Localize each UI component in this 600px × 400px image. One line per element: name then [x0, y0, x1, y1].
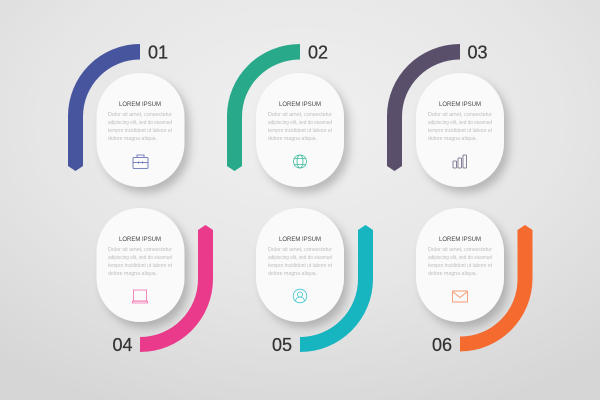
heading 03: LOREM IPSUM [439, 101, 481, 108]
panel: step 06 [416, 208, 532, 355]
arc 02 [227, 44, 300, 171]
heading 04: LOREM IPSUM [119, 236, 161, 243]
panel: step 01 [68, 42, 184, 187]
heading 05: LOREM IPSUM [279, 236, 321, 243]
number 05: 05 [272, 335, 292, 355]
body text 05: dolore magna aliqua. [268, 271, 317, 277]
panel: step 05 [256, 208, 373, 355]
heading 06: LOREM IPSUM [439, 236, 481, 243]
body text 03: adipiscing elit, sed do eiusmod [428, 120, 492, 126]
body text 01: tempor incididunt ut labore et [108, 128, 173, 134]
number 06: 06 [432, 335, 452, 355]
number 04: 04 [112, 335, 133, 355]
body text 01: Dolor sit amet, consectetur [108, 112, 172, 118]
body text 02: dolore magna aliqua. [268, 136, 317, 142]
card 02 [256, 73, 344, 187]
panel: step 03 [387, 42, 504, 187]
card 05 [256, 208, 344, 322]
body text 02: adipiscing elit, sed do eiusmod [268, 120, 332, 126]
card 01 [96, 73, 184, 187]
body text 01: adipiscing elit, sed do eiusmod [108, 120, 172, 126]
body text 03: dolore magna aliqua. [428, 136, 477, 142]
panel: step 04 [96, 208, 213, 355]
card 03 [416, 73, 504, 187]
card 06 [416, 208, 504, 322]
arc 04 [140, 225, 213, 352]
icon: globe [294, 155, 306, 168]
body text 06: tempor incididunt ut labore et [428, 263, 493, 269]
number 02: 02 [308, 42, 328, 62]
body text 05: tempor incididunt ut labore et [268, 263, 333, 269]
arc 01 [68, 44, 140, 171]
body text 06: adipiscing elit, sed do eiusmod [428, 255, 492, 261]
heading 01: LOREM IPSUM [119, 101, 161, 108]
heading 02: LOREM IPSUM [279, 101, 321, 108]
card 04 [96, 208, 184, 322]
body text 02: tempor incididunt ut labore et [268, 128, 333, 134]
icon: envelope [452, 291, 468, 302]
icon: bar chart [453, 155, 466, 168]
body text 04: tempor incididunt ut labore et [108, 263, 173, 269]
body text 01: dolore magna aliqua. [108, 136, 157, 142]
body text 05: adipiscing elit, sed do eiusmod [268, 255, 332, 261]
arc 06 [460, 225, 532, 352]
arc 03 [387, 44, 460, 171]
icon: user [293, 289, 307, 303]
body text 04: Dolor sit amet, consectetur [108, 247, 172, 253]
icon: laptop [132, 290, 148, 303]
panel: step 02 [227, 42, 344, 187]
body text 05: Dolor sit amet, consectetur [268, 247, 332, 253]
number 03: 03 [468, 42, 488, 62]
body text 06: dolore magna aliqua. [428, 271, 477, 277]
number 01: 01 [148, 42, 168, 62]
arc 05 [300, 225, 373, 352]
body text 04: adipiscing elit, sed do eiusmod [108, 255, 172, 261]
icon: briefcase [133, 155, 148, 168]
body text 06: Dolor sit amet, consectetur [428, 247, 492, 253]
body text 03: tempor incididunt ut labore et [428, 128, 493, 134]
body text 04: dolore magna aliqua. [108, 271, 157, 277]
body text 02: Dolor sit amet, consectetur [268, 112, 332, 118]
body text 03: Dolor sit amet, consectetur [428, 112, 492, 118]
